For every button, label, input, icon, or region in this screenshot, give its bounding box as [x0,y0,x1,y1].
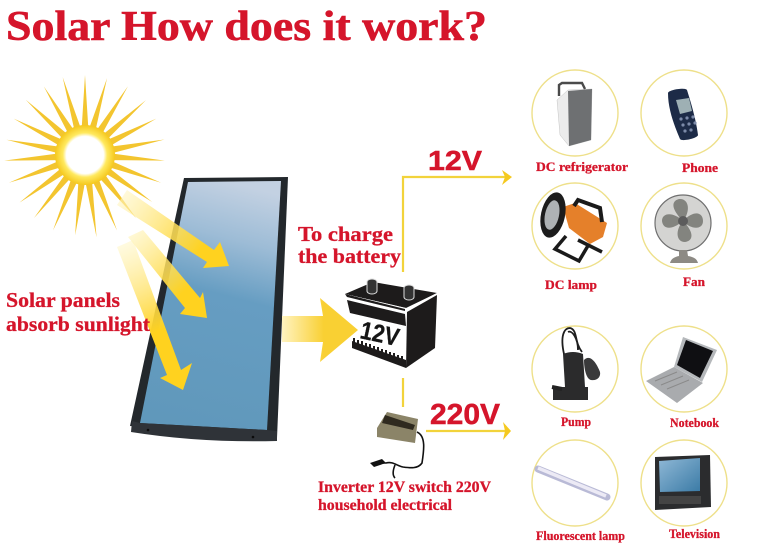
label: 12V: 12V [428,145,482,176]
connector: battery to 12V [403,170,512,272]
arrow: panel to battery [282,298,358,362]
device: pump [532,326,618,429]
icon: battery [345,279,437,368]
connector: inverter to 220V [426,422,511,440]
icon: sun [4,75,165,238]
device: television [641,440,727,541]
label: 220V: 220V [430,399,501,431]
icon: battery: 12V [358,316,402,352]
device: notebook [641,326,727,430]
device: notebook: Notebook [670,415,720,430]
device: fluorescent lamp [532,440,625,543]
device: fluorescent lamp: Fluorescent lamp [536,528,625,543]
icon: inverter [370,412,424,478]
device: fan [641,183,727,289]
arrow: sun to panel upper [117,190,229,268]
title: Solar How does it work? [6,4,487,50]
text: solar panels absorb sunlight: Solar panels [6,288,120,312]
text: to charge the battery: To charge [298,222,393,246]
text: solar panels absorb sunlight: absorb sunlight [6,312,150,336]
device: phone: Phone [682,160,718,175]
device: pump: Pump [561,414,591,429]
arrow: sun to panel lower [117,240,192,390]
text: inverter description: Inverter 12V switch 220V [318,479,491,496]
arrow: sun to panel middle [128,230,207,318]
text: inverter description: household electrical [318,497,453,514]
device: DC refrigerator [532,70,628,174]
text: to charge the battery: the battery [298,244,401,268]
solar panel [130,177,288,441]
connector: battery to inverter [402,378,404,407]
device: DC refrigerator: DC refrigerator [536,159,628,174]
device: fan: Fan [683,274,706,289]
device: television: Television [669,526,721,541]
device: phone [641,70,727,175]
device: DC lamp: DC lamp [545,277,597,292]
device: DC lamp [532,183,618,292]
